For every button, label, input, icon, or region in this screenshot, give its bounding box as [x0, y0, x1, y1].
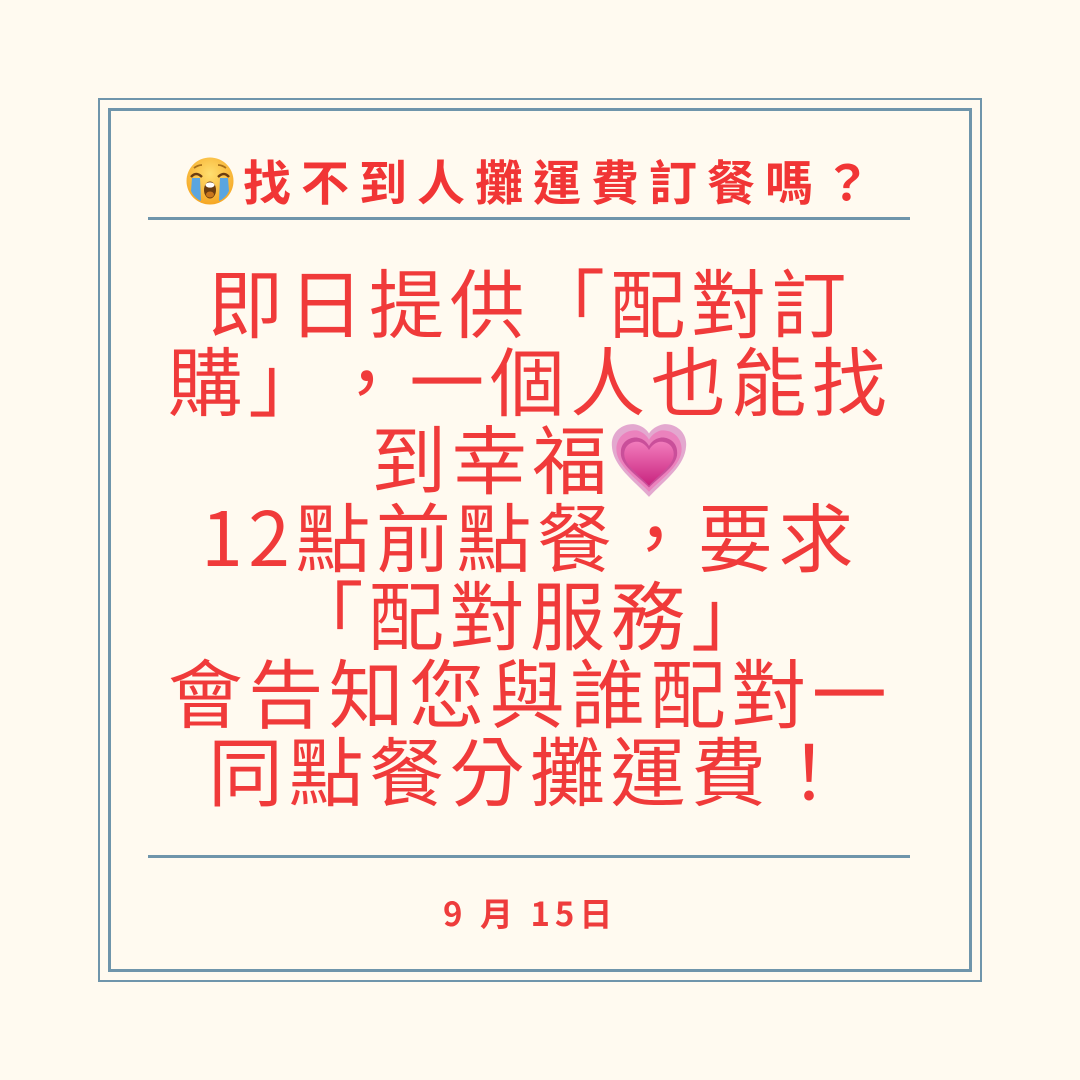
main message text: 12點前點餐，要求 [201, 479, 859, 588]
icon: crying face emoji [186, 158, 234, 204]
bottom divider [148, 855, 910, 858]
title: 找不到人攤運費訂餐嗎？ [243, 144, 881, 214]
main message text: 會告知您與誰配對一 [168, 635, 892, 744]
main message text [168, 245, 892, 822]
main message text: 同點餐分攤運費！ [208, 713, 852, 822]
date: 9 月 15日 [443, 888, 617, 936]
main message text: 「配對服務」 [288, 557, 772, 666]
icon: growing pink heart emoji [612, 424, 686, 497]
main message text: 即日提供「配對訂 [208, 245, 852, 354]
main message text: 購」，一個人也能找 [168, 323, 892, 432]
outer border frame [98, 98, 982, 982]
main message text: 到幸福 [371, 401, 613, 510]
inner border frame [108, 108, 972, 972]
top divider [148, 217, 910, 220]
